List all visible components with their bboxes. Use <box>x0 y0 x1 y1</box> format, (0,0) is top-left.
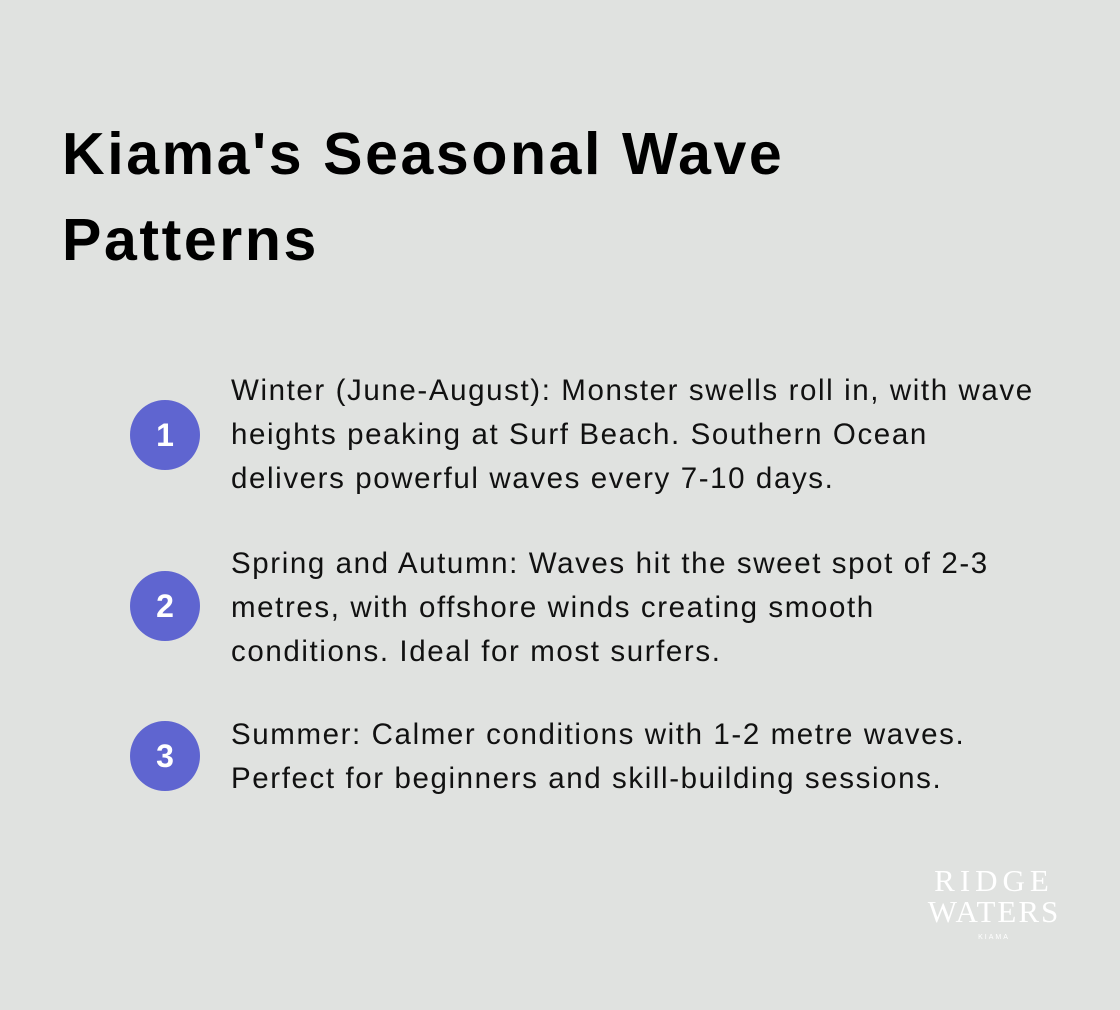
text 2: metres, with offshore winds creating smooth <box>231 591 875 624</box>
item 3: summer <box>130 718 965 795</box>
text 3 <box>231 718 965 795</box>
title: Patterns <box>62 207 319 273</box>
item 1: winter <box>130 374 1034 495</box>
title: Kiama's Seasonal Wave <box>62 121 784 187</box>
logo: KIAMA <box>978 934 1010 941</box>
title <box>62 121 784 273</box>
badge 2: 2 <box>156 588 174 624</box>
text 2: Spring and Autumn: Waves hit the sweet spot of 2-3 <box>231 547 989 580</box>
text 1: heights peaking at Surf Beach. Southern Ocean <box>231 418 928 451</box>
text 1 <box>231 374 1034 495</box>
badge 1: 1 <box>156 417 174 453</box>
text 2: conditions. Ideal for most surfers. <box>231 635 722 668</box>
badge 3 <box>130 721 200 791</box>
badge 1 <box>130 400 200 470</box>
logo: RIDGE <box>934 863 1054 898</box>
item 2: spring and autumn <box>130 547 989 668</box>
logo: WATERS <box>928 894 1060 929</box>
text 3: Summer: Calmer conditions with 1-2 metre waves. <box>231 718 965 751</box>
text 3: Perfect for beginners and skill-building sessions. <box>231 762 942 795</box>
text 1: Winter (June-August): Monster swells roll in, with wave <box>231 374 1034 407</box>
badge 2 <box>130 571 200 641</box>
logo <box>928 863 1060 941</box>
text 2 <box>231 547 989 668</box>
text 1: delivers powerful waves every 7-10 days. <box>231 462 834 495</box>
badge 3: 3 <box>156 738 174 774</box>
